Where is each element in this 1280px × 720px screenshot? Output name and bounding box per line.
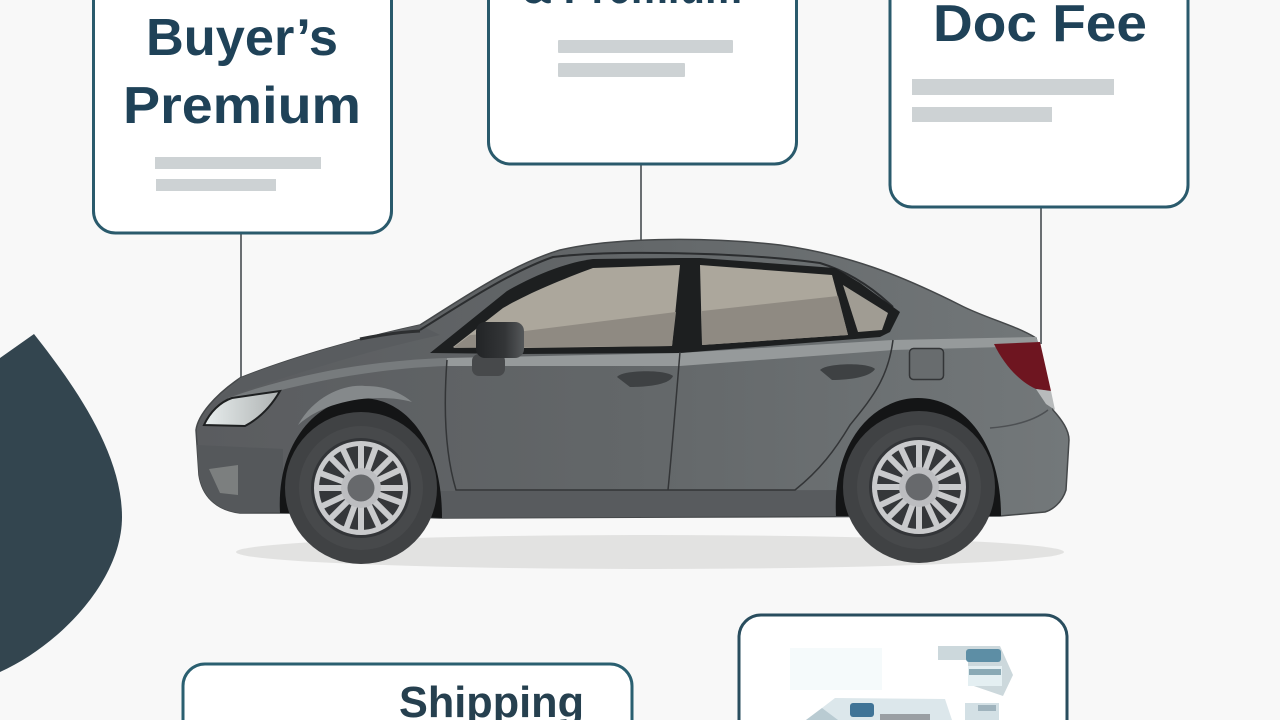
- connector: buyer's premium: [240, 233, 242, 378]
- heading: buyer's premium: Buyer’s: [146, 9, 338, 67]
- wheel arch: front: [280, 398, 442, 518]
- mirror stalk: [472, 354, 505, 376]
- car illustration: [196, 239, 1069, 564]
- wheel arch: rear: [836, 398, 1001, 516]
- headlight: [204, 391, 280, 426]
- card: doc fee: [890, 0, 1188, 207]
- front door handle: [617, 371, 673, 387]
- heading: buyer's premium: [123, 9, 361, 135]
- door seams: [445, 340, 893, 490]
- rear reflector strip: [1036, 389, 1055, 410]
- roof rail line: [420, 253, 893, 330]
- placeholder text lines: [558, 40, 733, 77]
- card: middle premium: [488, 0, 796, 164]
- rear crease: [990, 410, 1048, 428]
- fender highlight: [298, 386, 412, 425]
- ground shadow: [236, 535, 1064, 569]
- placeholder text lines: [155, 157, 321, 191]
- icon: small crate: [965, 703, 999, 720]
- front window: [453, 265, 680, 348]
- card: buyer's premium: [94, 0, 392, 233]
- mirror: [476, 322, 524, 358]
- hood shade: [222, 325, 440, 398]
- connector: middle card: [640, 164, 642, 242]
- hood line: [360, 331, 420, 339]
- fuel door: [910, 348, 944, 380]
- fog lamp: [209, 465, 238, 495]
- heading: buyer's premium: Premium: [123, 77, 361, 135]
- shoulder highlight: fender: [228, 358, 447, 404]
- sill: [440, 490, 850, 518]
- icon: upper-right cluster: [938, 646, 1013, 696]
- connector: doc fee: [1040, 207, 1042, 344]
- shoulder highlight: doors and rear: [447, 337, 1040, 366]
- placeholder text lines: [912, 79, 1114, 122]
- decorative dark blob: [0, 334, 122, 672]
- window frame: [430, 258, 900, 354]
- rear door handle: [820, 364, 875, 380]
- lower bumper shade: [197, 445, 283, 513]
- wheel: front: [285, 412, 437, 564]
- rear window: [700, 265, 848, 345]
- wheel: rear: [843, 411, 995, 563]
- tail light: [994, 342, 1051, 391]
- front window shade: [453, 312, 676, 348]
- icon: faded backdrop: [790, 648, 882, 690]
- card: shipping: [183, 664, 632, 720]
- quarter window: [843, 285, 888, 332]
- car body: [196, 239, 1069, 518]
- rear window shade: [702, 296, 848, 345]
- icon: building: [806, 698, 952, 720]
- card: storage illustration: [739, 615, 1067, 720]
